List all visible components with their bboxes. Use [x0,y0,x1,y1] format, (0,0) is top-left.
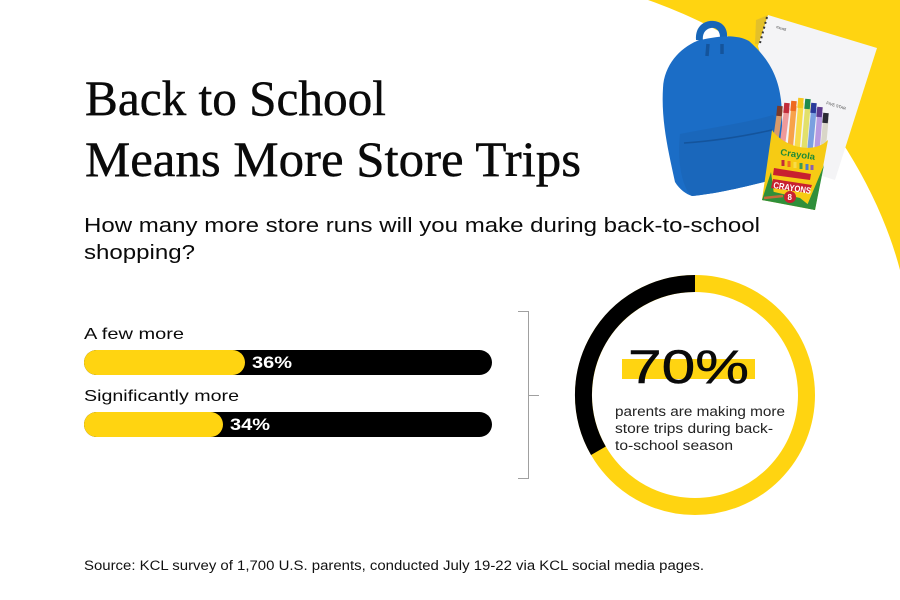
icon: notebook [755,15,877,180]
yellow corner shape [648,0,900,270]
subtitle question [84,215,760,264]
title: Means More Store Trips [85,131,581,187]
donut caption [615,404,785,453]
icon: crayon box [762,98,828,210]
source note: Source: KCL survey of 1,700 U.S. parents, conducted July 19-22 via KCL social media pages. [84,558,704,573]
bar: a few more [84,326,492,375]
bar: significantly more [84,388,492,437]
subtitle question: shopping? [84,242,195,264]
bar: significantly more: Significantly more [84,388,239,405]
icon: crayon box: Crayola [780,147,817,162]
bracket [518,312,539,478]
bar chart [84,326,492,437]
icon: notebook: mead [776,24,787,32]
highlight bar [622,359,755,379]
bar: a few more: A few more [84,326,184,343]
icon: crayon box: 8 [788,193,792,202]
title: Back to School [85,70,386,126]
icon: crayon box: CRAYONS [773,180,812,196]
donut caption: store trips during back- [615,421,773,436]
icon: backpack [663,21,782,196]
donut chart: 70% [583,283,806,506]
big number: 70% [628,340,749,393]
title [85,70,581,187]
illustration: school supplies [663,15,877,210]
bar: a few more: 36% [252,353,292,372]
icon: notebook: FIVE STAR [826,100,847,111]
donut caption: parents are making more [615,404,785,419]
bar: significantly more: 34% [230,415,270,434]
subtitle question: How many more store runs will you make during back-to-school [84,215,760,237]
donut caption: to-school season [615,438,733,453]
